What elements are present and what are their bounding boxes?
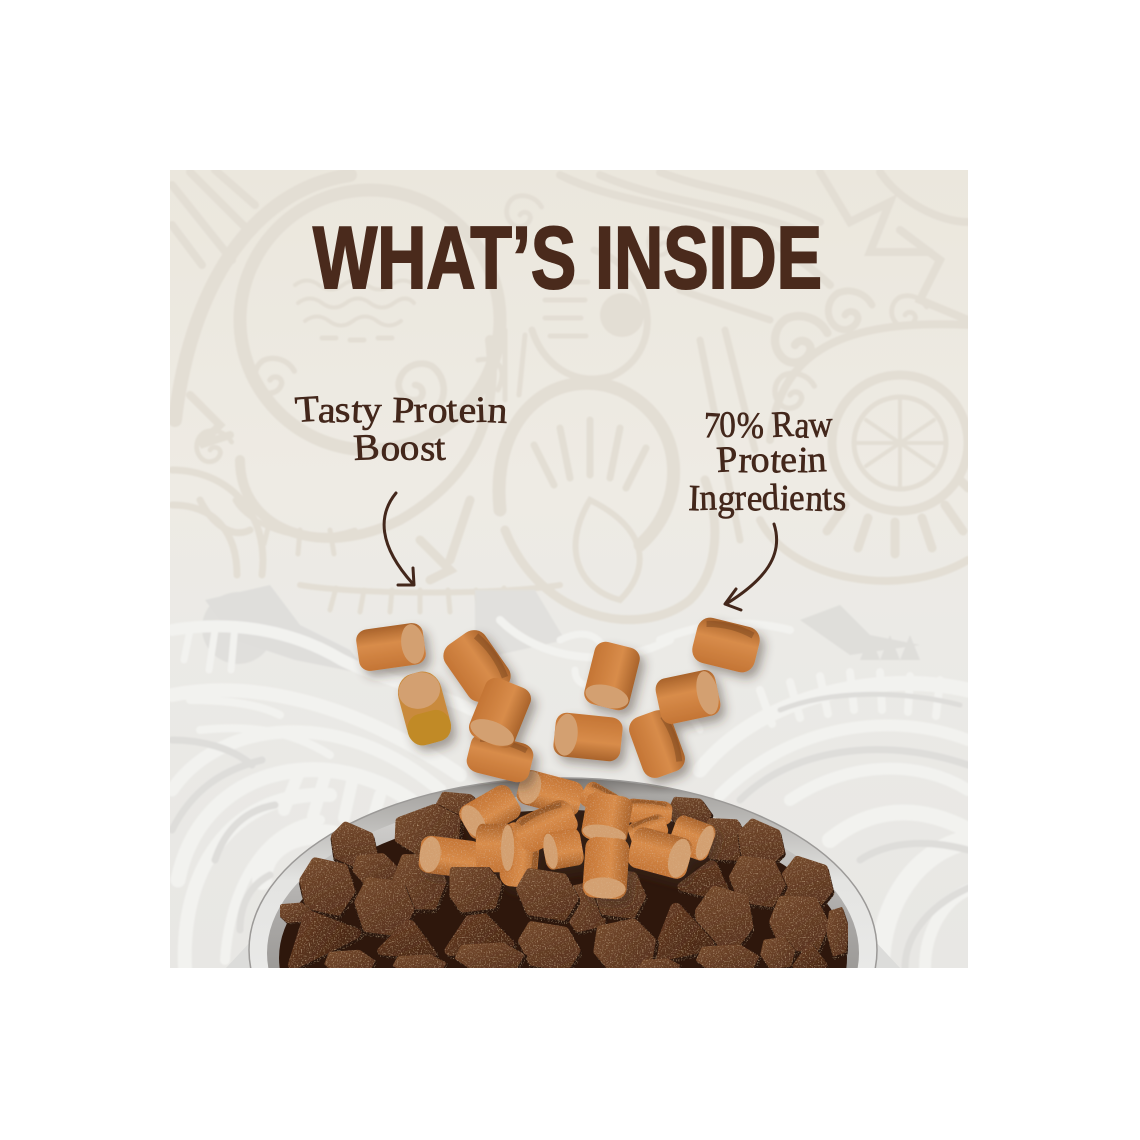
upper pattern: soft tan line work xyxy=(172,170,968,620)
kibble 6 xyxy=(582,639,642,713)
callout: 70% raw protein ingredients: Protein xyxy=(715,439,827,482)
arrow: to right kibbles xyxy=(725,524,777,610)
arrow: to left kibbles xyxy=(384,493,414,585)
callout: 70% raw protein ingredients: 70% Raw xyxy=(703,404,834,447)
title: WHAT’S INSIDE xyxy=(313,208,822,307)
brown pieces overlapping orange xyxy=(450,867,580,924)
orange protein pieces in bowl xyxy=(418,768,718,900)
kibble 1 xyxy=(355,622,427,672)
panel: patterned background xyxy=(170,170,968,968)
kibble pile: dark brown xyxy=(280,792,848,975)
kibble 7 xyxy=(552,712,624,762)
callout: 70% raw protein ingredients xyxy=(688,404,847,520)
callout: 70% raw protein ingredients: Ingredients xyxy=(688,477,847,520)
bowl xyxy=(226,770,900,968)
falling protein pieces xyxy=(355,615,763,785)
kibble 9 xyxy=(625,706,689,782)
callout: tasty protein boost: Tasty Protein xyxy=(294,388,509,432)
kibble 5 xyxy=(464,731,536,785)
lower pattern: pale bands and shadow silhouettes xyxy=(172,585,968,968)
kibble 10 xyxy=(689,615,763,675)
kibble 4 xyxy=(466,674,534,752)
kibble 2 xyxy=(393,667,455,749)
callout: tasty protein boost xyxy=(294,388,509,470)
kibble 8 xyxy=(653,668,723,726)
kibble 3 xyxy=(438,625,516,707)
callout: tasty protein boost: Boost xyxy=(352,427,447,470)
